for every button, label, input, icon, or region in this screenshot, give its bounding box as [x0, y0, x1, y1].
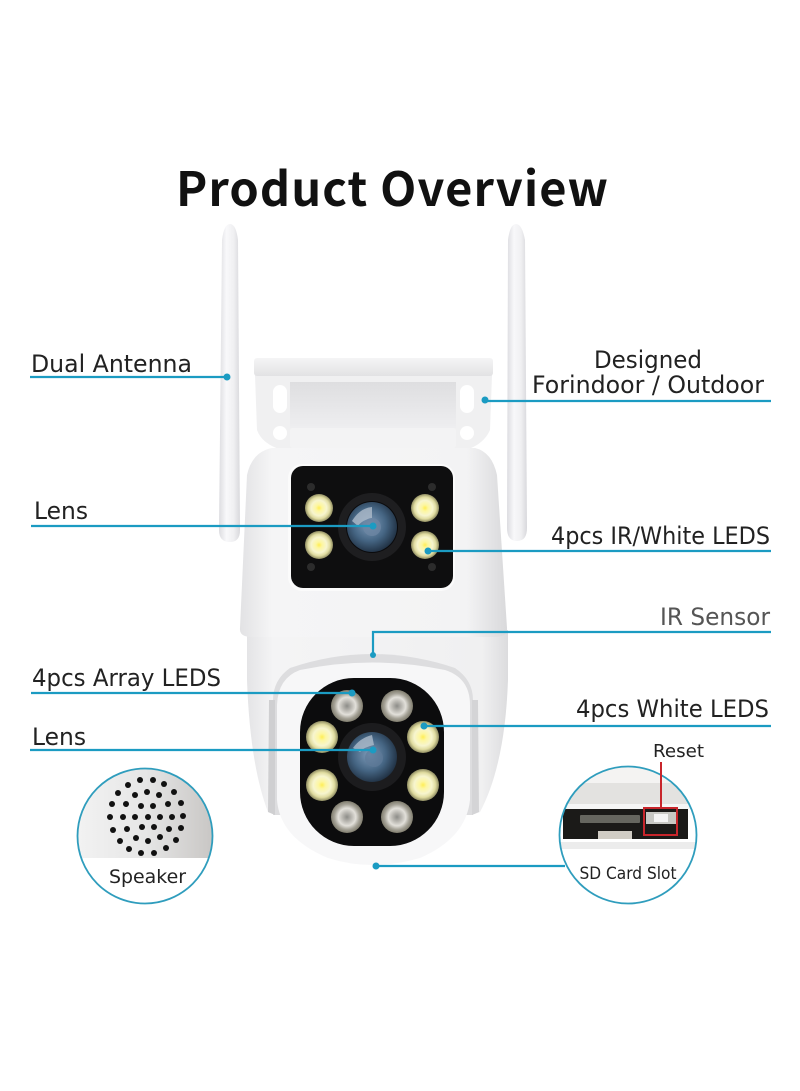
reset marker [644, 762, 677, 835]
callout: Dual Antenna: Dual Antenna [31, 350, 192, 378]
callout: 4pcs Array LEDS: 4pcs Array LEDS [32, 664, 221, 692]
callout: 4pcs IR/White LEDS: 4pcs IR/White LEDS [551, 522, 770, 550]
lower dome housing [247, 630, 508, 815]
callout: upper Lens [31, 497, 376, 530]
callout: speaker inset: Speaker [109, 866, 186, 888]
icon: speaker holes [107, 777, 186, 856]
camera illustration [219, 224, 527, 865]
lower face ring [277, 662, 470, 865]
callout: speaker inset [78, 768, 212, 904]
callout: upper Lens: Lens [34, 497, 88, 525]
upper camera housing [240, 448, 507, 637]
callout: 4pcs Array LEDS [31, 664, 356, 696]
callout: 4pcs White LEDS [420, 695, 771, 730]
callout: SD card slot inset [560, 741, 704, 904]
callout: SD card slot inset: SD Card Slot [580, 864, 677, 883]
callout: 4pcs White LEDS: 4pcs White LEDS [576, 695, 769, 723]
callout: Designed for indoor / outdoor [482, 346, 771, 404]
connector line to SD inset [372, 862, 565, 870]
upper black panel with LEDs and lens [288, 464, 455, 591]
callout: IR Sensor [370, 603, 771, 658]
callout: SD card slot inset: Reset [653, 741, 704, 762]
right antenna [507, 224, 527, 541]
wall mount bracket [254, 358, 493, 450]
lower dome recess [273, 654, 473, 815]
lower black panel with LEDs and lens [300, 678, 444, 846]
callout: lower Lens: Lens [32, 723, 86, 751]
callout: Designed for indoor / outdoor: Forindoor / Outdoor [532, 371, 764, 399]
callout: 4pcs IR/White LEDS [424, 522, 771, 554]
title: Product Overview [176, 151, 608, 220]
callout: lower Lens [30, 723, 376, 754]
left antenna [219, 224, 240, 542]
callout: IR Sensor: IR Sensor [660, 603, 770, 631]
callout: Designed for indoor / outdoor: Designed [594, 346, 702, 374]
